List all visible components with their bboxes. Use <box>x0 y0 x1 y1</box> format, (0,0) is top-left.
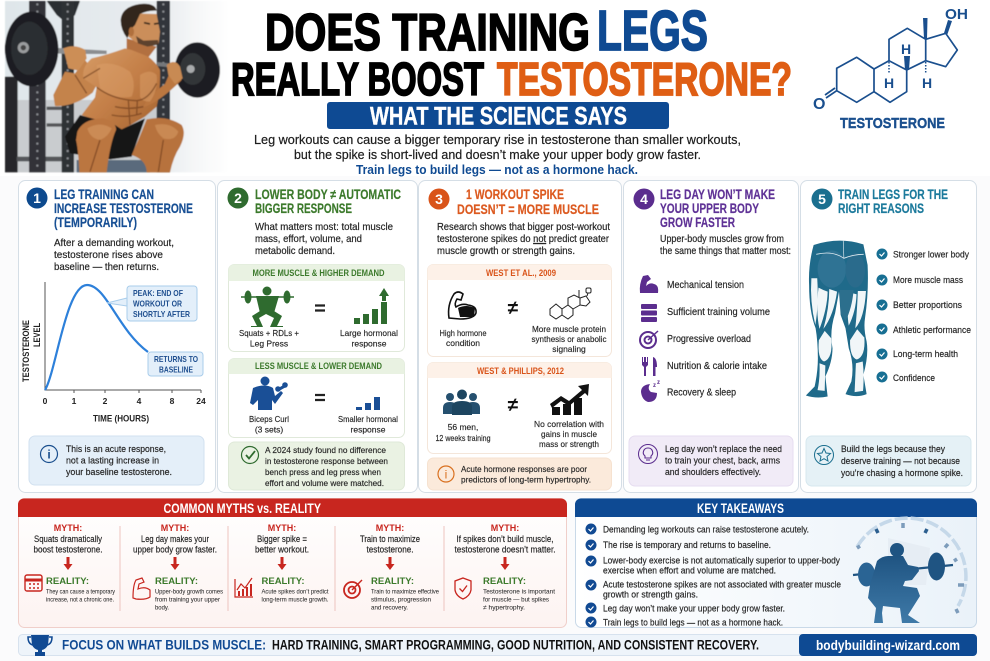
note: train everything: Leg day won’t replace the need <box>665 444 782 455</box>
takeaways checklist: Demanding leg workouts can raise testosterone acutely. <box>603 524 809 536</box>
intro text: Leg workouts can cause a bigger temporary rise in testosterone than smaller workouts, <box>254 132 741 147</box>
study box: West et al 2009: High hormone <box>440 328 487 338</box>
line chart: testosterone over time: LEVEL <box>32 323 42 347</box>
list: growth drivers <box>640 275 770 402</box>
myth column 5: MYTH: <box>491 523 519 533</box>
intro text: but the spike is short-lived and doesn’t make your upper body grow faster. <box>294 147 701 162</box>
icon: chart <box>235 578 253 597</box>
heading 2: BIGGER RESPONSE <box>255 201 352 216</box>
body text 1: After a demanding workout, <box>54 237 174 249</box>
number badge 1 <box>26 188 48 208</box>
myth column 4: REALITY: <box>371 576 414 587</box>
line chart: testosterone over time: 24 <box>196 396 206 406</box>
myth column 4: MYTH: <box>376 523 404 533</box>
heading 1 <box>54 187 193 230</box>
myth column 5: REALITY: <box>483 576 526 587</box>
myth column 2: MYTH: <box>161 523 189 533</box>
takeaways checklist: growth or strength gains. <box>603 590 698 600</box>
website badge <box>799 634 977 656</box>
list: growth drivers: Recovery & sleep <box>667 386 736 398</box>
testosterone molecule <box>813 6 968 132</box>
icon: muscle <box>640 275 658 293</box>
study box: West et al 2009 <box>428 264 612 356</box>
heading 4: YOUR UPPER BODY <box>660 201 759 216</box>
myth column 1: REALITY: <box>46 576 89 587</box>
study box: West and Phillips 2012: 56 men, <box>448 422 478 432</box>
body text 4: the same things that matter most: <box>660 245 791 257</box>
checklist: benefits: Stronger lower body <box>893 250 969 260</box>
myth column 3: better workout. <box>255 544 309 556</box>
myth column 3: MYTH: <box>268 523 296 533</box>
heading 4: LEG DAY WON’T MAKE <box>660 187 775 202</box>
takeaways checklist: exercise when effort and volume are matched. <box>603 566 776 576</box>
takeaways checklist: Leg day won’t make your upper body grow faster. <box>603 604 785 614</box>
comparison box: more muscle <box>228 264 404 352</box>
number badge 3: 3 <box>435 191 443 207</box>
myth column 1: MYTH: <box>54 523 82 533</box>
icon: calendar <box>25 575 42 591</box>
symbol: not equal: ≠ <box>508 298 519 319</box>
footer banner: focus on what builds muscle <box>18 634 808 656</box>
myth column 1 <box>25 523 116 604</box>
myth column 3 <box>235 523 329 604</box>
panel 4: leg day won't make upper body grow <box>624 180 798 492</box>
intro text <box>254 132 741 177</box>
testosterone molecule: TESTOSTERONE <box>840 115 945 132</box>
panel: common myths vs reality <box>18 498 567 628</box>
myth column 5: for muscle — but spikes <box>483 596 550 604</box>
comparison box: more muscle: MORE MUSCLE & HIGHER DEMAND <box>252 268 385 279</box>
note: acute response <box>29 436 204 485</box>
icon: fork and knife <box>642 357 657 376</box>
note: acute response: not a lasting increase in <box>66 456 159 466</box>
note: poor predictors: Acute hormone responses are poor <box>461 464 587 474</box>
myth column 4: stimulus, progression <box>371 596 431 604</box>
myth column 2 <box>133 523 224 612</box>
number badge 5 <box>812 188 832 210</box>
note: poor predictors <box>428 458 612 490</box>
myth column 3: Acute spikes don’t predict <box>262 588 329 596</box>
panel 2: lower body is not automatic <box>218 180 418 492</box>
callout: returns to baseline: BASELINE <box>159 364 193 374</box>
icon: rising bars <box>354 288 389 324</box>
note: poor predictors: i <box>445 468 447 482</box>
panel 5: train legs for the right reasons <box>800 180 976 492</box>
checklist: benefits: More muscle mass <box>893 275 963 286</box>
list: growth drivers: Mechanical tension <box>667 279 744 291</box>
symbol: equals <box>315 395 325 400</box>
heading 1: (TEMPORARILY) <box>54 215 137 230</box>
testosterone molecule: H <box>884 75 894 91</box>
footer banner: focus on what builds muscle: FOCUS ON WHAT BUILDS MUSCLE: <box>62 638 266 652</box>
icon: trophy <box>28 635 52 656</box>
myth column 5 <box>454 523 556 612</box>
note: build the legs: deserve training — not because <box>841 456 960 467</box>
heading 3: 1 WORKOUT SPIKE <box>466 187 564 202</box>
note: acute response: This is an acute response, <box>66 444 166 455</box>
number badge 4 <box>634 188 654 210</box>
myth column 3: Bigger spike = <box>257 534 307 545</box>
myth column 2: REALITY: <box>155 576 198 587</box>
body text 3 <box>437 221 610 257</box>
website badge: bodybuilding-wizard.com <box>816 637 960 653</box>
illustration: leg muscles from behind <box>806 240 868 397</box>
panel: key takeaways <box>575 498 977 628</box>
line chart: testosterone over time: 2 <box>103 396 108 406</box>
myth column 3: long-term muscle growth. <box>262 596 329 604</box>
comparison box: less muscle: response <box>351 424 386 434</box>
body text 2: metabolic demand. <box>255 245 335 257</box>
takeaways checklist: The rise is temporary and returns to baseline. <box>603 540 771 551</box>
footer banner: focus on what builds muscle: HARD TRAINING, SMART PROGRAMMING, GOOD NUTRITION, AND CONSISTENT RECOVERY. <box>272 638 759 652</box>
comparison box: more muscle: Squats + RDLs + <box>239 328 299 338</box>
line chart: testosterone over time: 0 <box>43 396 48 406</box>
body text 3: muscle growth or strength gains. <box>437 245 575 257</box>
callout: peak: PEAK: END OF <box>133 288 183 298</box>
heading 4 <box>660 187 775 230</box>
takeaways checklist: Train legs to build legs — not as a hormone hack. <box>603 618 783 628</box>
comparison box: less muscle: Smaller hormonal <box>338 414 398 424</box>
study box: West and Phillips 2012: WEST & PHILLIPS, 2012 <box>477 366 564 377</box>
callout: peak: WORKOUT OR <box>133 298 182 308</box>
number badge 2: 2 <box>234 190 242 206</box>
number badge 2 <box>228 188 248 208</box>
list: growth drivers: Progressive overload <box>667 333 751 345</box>
body text 1: testosterone rises above <box>54 249 163 261</box>
title: REALLY BOOST <box>231 53 484 105</box>
note: train everything: and shoulders effectively. <box>665 467 761 478</box>
heading 3: DOESN’T = MORE MUSCLE <box>457 202 599 217</box>
note: train everything: to train your chest, back, arms <box>665 456 780 466</box>
body text 1 <box>54 237 174 273</box>
icon: arm outline <box>133 578 150 599</box>
comparison box: less muscle: Biceps Curl <box>249 414 289 424</box>
icon: sleep: z <box>657 380 660 386</box>
myth column 4: and recovery. <box>371 604 408 612</box>
takeaways checklist: Lower-body exercise is not automatically superior to upper-body <box>603 556 840 566</box>
number badge 3 <box>428 188 450 210</box>
note: 2024 study: A 2024 study found no difference <box>265 445 386 455</box>
icon: flexed arm <box>449 292 476 319</box>
body text 4: Upper-body muscles grow from <box>660 233 784 245</box>
myth column 5: Testosterone is important <box>483 588 555 596</box>
line chart: testosterone over time: 4 <box>137 396 142 406</box>
takeaways checklist: Acute testosterone spikes are not associated with greater muscle <box>603 580 841 590</box>
myth column 4: Train to maximize <box>360 534 420 545</box>
heading 2 <box>255 187 401 216</box>
callout: returns to baseline <box>148 352 203 376</box>
checklist: benefits: Long-term health <box>893 349 958 360</box>
icon: group of people <box>443 390 480 415</box>
study box: West et al 2009: condition <box>446 338 480 348</box>
testosterone molecule: H <box>901 41 911 57</box>
note: 2024 study <box>228 442 404 490</box>
icon: mini molecule <box>550 288 591 319</box>
myth column 2: body. <box>155 604 169 612</box>
comparison box: less muscle <box>228 358 404 438</box>
myth column 2: Upper-body growth comes <box>155 588 224 596</box>
note: train everything <box>629 436 793 486</box>
icon: biceps curl <box>250 376 288 410</box>
line chart: testosterone over time: TIME (HOURS) <box>93 414 149 424</box>
body text 3: Research shows that bigger post-workout <box>437 221 610 233</box>
line chart: testosterone over time <box>21 282 206 424</box>
comparison box: less muscle: (3 sets) <box>255 424 283 434</box>
icon: squat <box>241 286 294 327</box>
title: LEGS <box>597 0 708 63</box>
heading 3 <box>457 187 599 217</box>
study box: West et al 2009: signaling <box>552 344 586 354</box>
comparison box: more muscle: response <box>352 338 387 348</box>
panel 3: one workout spike <box>418 180 622 492</box>
body text 1: baseline — then returns. <box>54 261 159 273</box>
note: build the legs: you’re chasing a hormone spike. <box>841 468 963 479</box>
note: 2024 study: effort and volume were matched. <box>265 478 384 488</box>
note: 2024 study: bench press and leg press when <box>265 467 381 477</box>
number badge 1: 1 <box>33 190 41 206</box>
panel 1: leg training can increase testosterone <box>18 180 216 492</box>
myths header <box>18 498 567 517</box>
icon: target <box>640 331 658 348</box>
body text 4 <box>660 233 791 257</box>
myth column 4 <box>344 523 439 612</box>
myth column 2: Leg day makes your <box>141 534 209 545</box>
icon: sleep <box>641 380 660 402</box>
callout: peak <box>107 286 197 321</box>
myth column 1: They can cause a temporary <box>46 588 116 596</box>
testosterone molecule: H <box>922 75 932 91</box>
note: acute response: i <box>47 448 51 462</box>
heading 2: LOWER BODY ≠ AUTOMATIC <box>255 187 401 202</box>
icon: growth chart <box>550 384 589 415</box>
line chart: testosterone over time: 8 <box>170 396 175 406</box>
title <box>231 0 792 105</box>
note: poor predictors: predictors of long-term hypertrophy. <box>461 474 591 484</box>
hero photo: athlete squatting <box>5 1 230 172</box>
checklist: benefits: Better proportions <box>893 300 962 311</box>
number badge 5: 5 <box>818 191 826 207</box>
note: build the legs <box>806 436 971 486</box>
heading 4: GROW FASTER <box>660 215 735 230</box>
callout: peak: SHORTLY AFTER <box>133 309 190 319</box>
comparison box: more muscle: Large hormonal <box>340 328 398 338</box>
myth column 5: testosterone doesn’t matter. <box>454 544 556 556</box>
heading 5 <box>838 187 948 216</box>
takeaways header <box>575 498 977 517</box>
heading 5: RIGHT REASONS <box>838 201 924 216</box>
intro text: Train legs to build legs — not as a hormone hack. <box>356 162 638 177</box>
myth column 5: ≠ hypertrophy. <box>483 604 525 612</box>
body text 2: What matters most: total muscle <box>255 221 393 233</box>
study box: West et al 2009: WEST ET AL., 2009 <box>486 268 556 279</box>
icon: small bars <box>356 397 380 410</box>
study box: West et al 2009: synthesis or anabolic <box>532 334 607 344</box>
study box: West and Phillips 2012 <box>428 362 612 454</box>
body text 2: mass, effort, volume, and <box>255 233 362 245</box>
testosterone molecule: OH <box>945 6 968 23</box>
body text 3: testosterone spikes do not predict greater <box>437 233 609 245</box>
takeaways checklist <box>586 524 841 628</box>
heading 5: TRAIN LEGS FOR THE <box>838 187 948 202</box>
number badge 4: 4 <box>640 191 648 207</box>
body text 2 <box>255 221 393 257</box>
title: DOES TRAINING <box>265 4 590 62</box>
icon: sleep: z <box>653 383 656 389</box>
icon: target <box>344 580 362 598</box>
icon: volume stack <box>641 304 657 322</box>
study box: West and Phillips 2012: mass or strength <box>539 439 599 449</box>
myth column 5: If spikes don’t build muscle, <box>456 534 554 545</box>
study box: West and Phillips 2012: 12 weeks training <box>436 433 491 443</box>
myth column 2: from training your upper <box>155 596 221 604</box>
study box: West et al 2009: More muscle protein <box>532 324 606 334</box>
title: TESTOSTERONE? <box>497 53 792 105</box>
myth column 4: testosterone. <box>366 544 414 556</box>
list: growth drivers: Sufficient training volume <box>667 306 770 318</box>
checklist: benefits <box>876 248 971 384</box>
myth column 1: increase, not a chronic one. <box>46 596 114 604</box>
icon: shield <box>455 578 471 599</box>
comparison box: less muscle: LESS MUSCLE & LOWER DEMAND <box>255 361 382 372</box>
list: growth drivers: Nutrition & calorie intake <box>667 360 767 372</box>
myth column 2: upper body grow faster. <box>133 544 217 556</box>
note: build the legs: Build the legs because they <box>841 444 945 455</box>
heading 1: INCREASE TESTOSTERONE <box>54 201 193 216</box>
myth column 1: Squats dramatically <box>34 534 102 545</box>
callout: returns to baseline: RETURNS TO <box>154 354 198 364</box>
myth column 3: REALITY: <box>262 576 305 587</box>
symbol: equals <box>315 306 325 310</box>
checklist: benefits: Athletic performance <box>893 325 971 336</box>
myths header: COMMON MYTHS vs. REALITY <box>164 501 321 516</box>
study box: West and Phillips 2012: No correlation with <box>534 419 604 429</box>
myth column 1: boost testosterone. <box>34 544 102 556</box>
illustration: squat silhouette with gauge <box>853 518 966 623</box>
subtitle banner: WHAT THE SCIENCE SAYS <box>370 102 627 130</box>
line chart: testosterone over time: TESTOSTERONE <box>21 320 31 382</box>
comparison box: more muscle: Leg Press <box>250 338 288 348</box>
line chart: testosterone over time: 1 <box>72 396 77 406</box>
symbol: not equal: ≠ <box>508 395 519 416</box>
checklist: benefits: Confidence <box>893 373 935 384</box>
testosterone molecule: O <box>813 96 825 113</box>
note: acute response: your baseline testosterone. <box>66 467 172 478</box>
takeaways header: KEY TAKEAWAYS <box>697 501 784 516</box>
myth column 4: Train to maximize effective <box>371 588 439 596</box>
study box: West and Phillips 2012: gains in muscle <box>541 429 597 439</box>
heading 1: LEG TRAINING CAN <box>54 187 154 202</box>
note: 2024 study: in testosterone response between <box>265 456 388 466</box>
